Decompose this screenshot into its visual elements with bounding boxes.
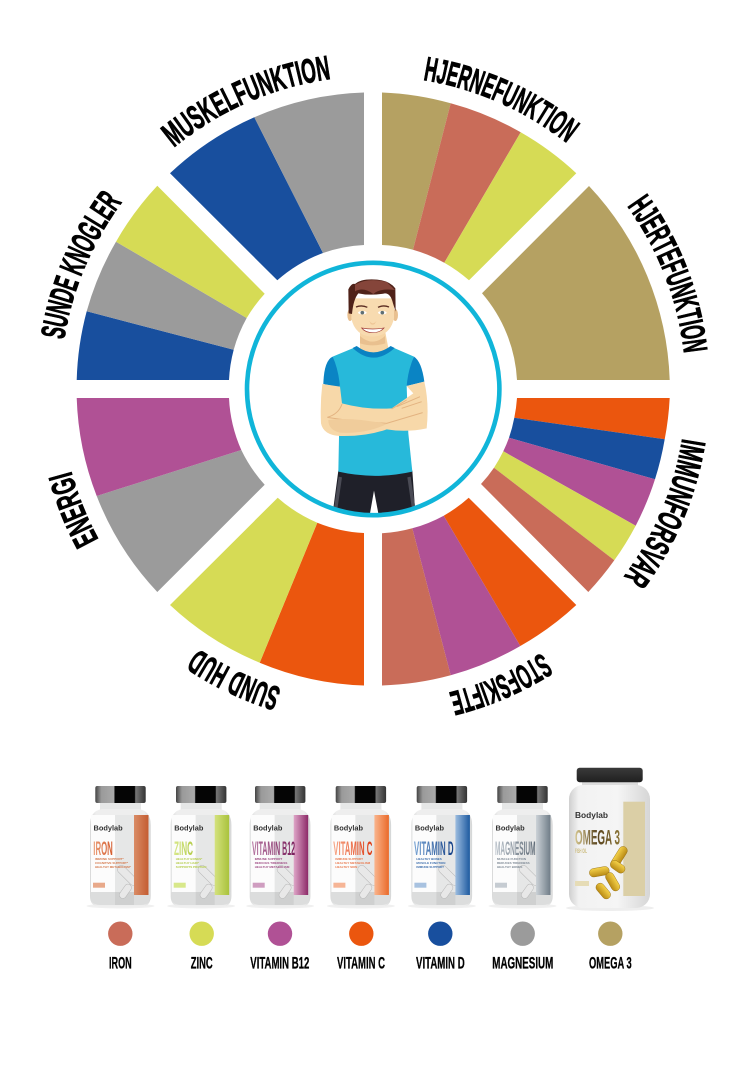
sector: Sund hud	[170, 498, 364, 686]
product: Vitamin D bottle: HEALTHY BONES	[416, 857, 442, 861]
legend: Vitamin B12: VITAMIN B12	[250, 953, 309, 972]
legend: Vitamin D	[416, 922, 465, 972]
product: Zinc bottle: HEALTHY HAIR*	[176, 861, 200, 865]
legend: Iron	[108, 922, 132, 972]
heading: Muskelfunktion: MUSKELFUNKTION	[160, 55, 330, 148]
product: Magnesium bottle: MUSCLE FUNCTION	[497, 857, 526, 861]
legend: Vitamin C: VITAMIN C	[337, 953, 385, 972]
product: Vitamin B12 bottle: VITAMIN B12	[252, 839, 295, 860]
heading: Energi: ENERGI	[48, 472, 98, 550]
sector: Muskelfunktion	[170, 92, 364, 280]
product: Vitamin C bottle: HEALTHY METABOLISM	[335, 861, 371, 865]
legend: Magnesium: MAGNESIUM	[492, 953, 553, 972]
sector: Stofskifte	[382, 498, 576, 686]
heading: Stofskifte: STOFSKIFTE	[449, 654, 552, 716]
legend: Vitamin D: VITAMIN D	[416, 953, 465, 972]
center: man in blue t-shirt	[247, 263, 499, 515]
product: Zinc bottle: ZINC	[174, 839, 193, 860]
sector: Hjertefunktion	[482, 186, 670, 380]
product: Vitamin C bottle: VITAMIN C	[333, 839, 372, 860]
product: Vitamin D bottle: Bodylab	[415, 824, 445, 832]
product: Magnesium bottle: REDUCES TIREDNESS	[497, 861, 530, 865]
product: Vitamin D bottle	[408, 786, 476, 908]
product: Zinc bottle: Bodylab	[174, 824, 204, 832]
product: Iron bottle: IRON	[93, 839, 113, 860]
ring around man	[247, 263, 499, 515]
product: Vitamin B12 bottle: IMMUNE SUPPORT	[255, 857, 282, 861]
heading: Hjernefunktion: HJERNEFUNKTION	[424, 56, 581, 143]
product: Iron bottle: COGNITIVE SUPPORT*	[95, 861, 129, 865]
product: Vitamin B12 bottle	[246, 786, 314, 908]
product: Vitamin B12 bottle: REDUCES TIREDNESS	[255, 861, 287, 865]
heading: Sund hud: SUND HUD	[188, 651, 280, 710]
legend: Omega 3: OMEGA 3	[589, 953, 632, 972]
product: Vitamin B12 bottle: HEALTHY METABOLISM	[255, 865, 290, 869]
product: Vitamin D bottle: VITAMIN D	[414, 839, 454, 860]
product: Vitamin C bottle: Bodylab	[334, 824, 364, 832]
product: Magnesium bottle: HEALTHY BONES	[497, 865, 522, 869]
product: Zinc bottle: HEALTHY BONES*	[176, 857, 203, 861]
legend: Iron: IRON	[109, 953, 132, 972]
wheel: vitamin benefits	[77, 92, 670, 686]
product: Omega 3 bottle: FISH OIL	[575, 849, 587, 855]
product: Omega 3 bottle: OMEGA 3	[575, 826, 620, 849]
product: Zinc bottle: SUPPORTS PROTEIN	[176, 865, 206, 869]
product: Zinc bottle	[167, 786, 235, 908]
sector: Sunde knogler	[77, 186, 265, 380]
legend: Zinc: ZINC	[191, 953, 213, 972]
sector: Immunforsvar	[481, 398, 670, 592]
sector: Hjernefunktion	[382, 92, 576, 280]
product: Vitamin C bottle: IMMUNE SUPPORT	[335, 857, 363, 861]
legend: Zinc	[190, 922, 214, 972]
product: Vitamin C bottle: HEALTHY SKIN	[335, 865, 357, 869]
legend: Omega 3	[589, 922, 632, 972]
product: Vitamin C bottle	[327, 786, 395, 908]
heading: Hjertefunktion: HJERTEFUNKTION	[627, 193, 708, 353]
sector: Energi	[77, 398, 265, 592]
legend: Vitamin C	[337, 922, 385, 972]
heading: Sunde knogler: SUNDE KNOGLER	[41, 190, 122, 339]
product: Iron bottle: IMMUNE SUPPORT*	[95, 857, 125, 861]
product: Magnesium bottle: MAGNESIUM	[495, 839, 536, 860]
legend: Vitamin B12	[250, 922, 309, 972]
legend: Magnesium	[492, 922, 553, 972]
product: Vitamin D bottle: IMMUNE SUPPORT	[416, 865, 444, 869]
product: Iron bottle: HEALTHY METABOLISM*	[95, 865, 132, 869]
heading: Immunforsvar: IMMUNFORSVAR	[623, 439, 706, 588]
product: Vitamin D bottle: MUSCLE FUNCTION	[416, 861, 445, 865]
product: Iron bottle	[86, 786, 154, 908]
product: Magnesium bottle	[488, 786, 556, 908]
product: Magnesium bottle: Bodylab	[496, 824, 525, 832]
product: Vitamin B12 bottle: Bodylab	[253, 824, 283, 832]
product: Omega 3 bottle	[566, 768, 654, 911]
product: Iron bottle: Bodylab	[94, 824, 123, 832]
product: Omega 3 bottle: Bodylab	[575, 810, 608, 820]
